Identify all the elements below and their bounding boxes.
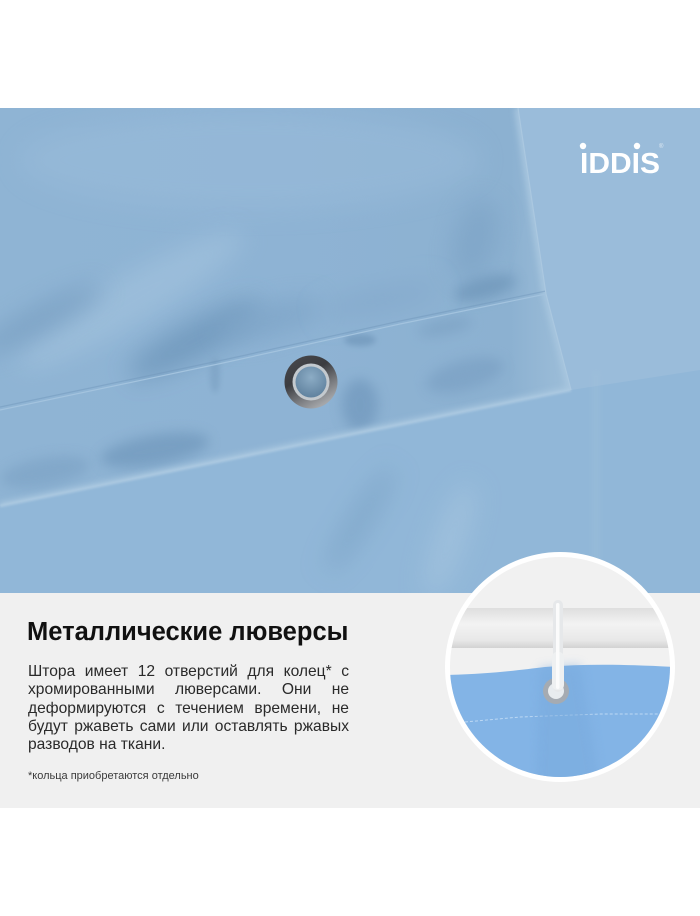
- body text: Штора имеет 12 отверстий для колец* с: [28, 663, 349, 680]
- body text: будут ржаветь сами или оставлять ржавых: [28, 718, 349, 735]
- panel: text background: [0, 593, 700, 808]
- body text: [28, 663, 349, 753]
- footnote: *кольца приобретаются отдельно: [28, 770, 199, 782]
- curtain: [450, 664, 670, 777]
- stitching: [0, 294, 546, 410]
- eyelet: [543, 678, 569, 704]
- logo: IDDIS: [580, 148, 660, 180]
- body text: разводов на ткани.: [28, 736, 165, 753]
- icon: metal grommet: [284, 356, 338, 408]
- shower ring: [553, 600, 563, 654]
- heading: Металлические люверсы: [27, 618, 348, 646]
- logo: ®: [659, 143, 664, 150]
- panel: fabric photo: [0, 108, 700, 602]
- inset circle: rod, ring and curtain: [445, 552, 675, 790]
- body text: деформируются с течением времени, не: [28, 700, 349, 717]
- right and lower bright fold edge: [0, 108, 571, 506]
- rod: [445, 608, 675, 648]
- curtain hem: [0, 108, 580, 508]
- body text: хромированными люверсами. Они не: [28, 681, 349, 698]
- product photo and inset illustration: [0, 108, 700, 808]
